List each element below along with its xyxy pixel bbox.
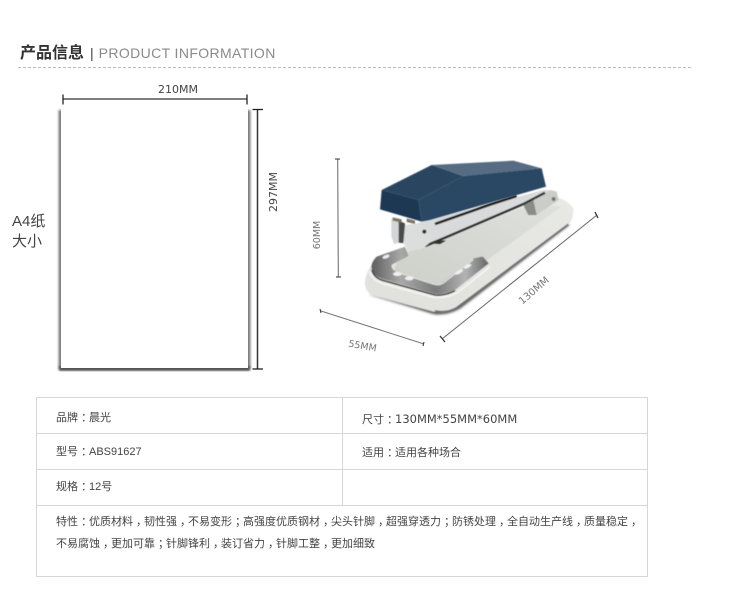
spec: features: ，	[136, 516, 147, 528]
height dimension: 297MM: 297MM	[267, 172, 280, 212]
spec: features: ，	[576, 516, 587, 528]
spec: features: ，	[323, 516, 334, 528]
stapler chrome guide and metal arm	[369, 190, 559, 298]
spec: features: 特性 优质材料 韧性强 不易变形 高强度优质钢材 尖头针脚 超强穿透力 防锈处理 全自动生产线 质量稳定	[56, 516, 628, 528]
chrome staple guide	[372, 247, 489, 294]
spec: features: 不易腐蚀 更加可靠 针脚锋利 装订省力 针脚工整 更加细致	[56, 538, 375, 550]
spec: features: ，	[323, 538, 334, 550]
spec: features: ，	[378, 516, 389, 528]
stapler jaw	[391, 218, 399, 244]
stapler dimension: 130MM: 130MM	[517, 275, 552, 307]
spec: features: ，	[268, 538, 279, 550]
spec: features: ：	[81, 516, 92, 528]
spec: size: ：	[387, 414, 398, 426]
bracket post	[523, 200, 537, 215]
stapler dimension: 130MM	[440, 212, 598, 342]
A4 paper label	[12, 213, 45, 250]
stapler dimension: 55MM	[320, 309, 424, 354]
spec: features	[56, 516, 642, 550]
spec: features: ；	[444, 516, 455, 528]
spec table grid	[36, 398, 648, 576]
navy stapler head	[380, 161, 546, 222]
spec: features: ，	[499, 516, 510, 528]
hinge bracket	[532, 190, 559, 215]
spec: brand: ：	[81, 412, 92, 424]
spec: features: ；	[235, 516, 246, 528]
spec: specification: ：	[81, 481, 92, 493]
spec: brand: 品牌 晨光	[56, 412, 111, 424]
spec: specification: 规格 12号	[56, 481, 112, 493]
width dimension: 210MM: 210MM	[158, 83, 198, 96]
spec: usage: 适用 适用各种场合	[362, 447, 461, 459]
spec: features: ，	[631, 516, 642, 528]
spec: features: ，	[213, 538, 224, 550]
stapler base	[365, 195, 573, 314]
spec: features: ；	[158, 538, 169, 550]
spec: size: 尺寸 130MM*55MM*60MM	[362, 412, 517, 426]
stapler dimension: 60MM	[312, 159, 341, 277]
metal arm	[417, 190, 551, 247]
A4 paper label: A4纸	[12, 213, 45, 230]
A4 paper label: 大小	[12, 233, 42, 250]
stapler dimension: 60MM: 60MM	[312, 221, 323, 249]
spec: features: ，	[180, 516, 191, 528]
spec: features: ，	[103, 538, 114, 550]
heading: 产品信息 | PRODUCT INFORMATION	[20, 45, 276, 62]
stapler dimension: 55MM: 55MM	[347, 339, 377, 354]
spec: model: 型号 ABS91627	[56, 446, 142, 458]
spec: model: ：	[81, 446, 92, 458]
spec: usage: ：	[387, 447, 398, 459]
A4 paper sheet	[58, 107, 250, 371]
